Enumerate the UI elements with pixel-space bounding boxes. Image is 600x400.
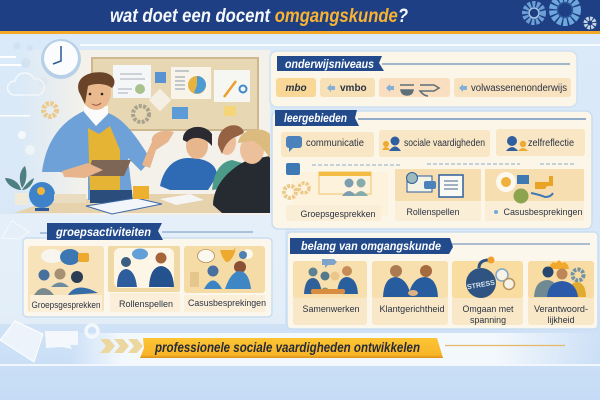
card: Groepsgesprekken: Groepsgesprekken: [300, 209, 376, 220]
banner: professionele sociale vaardigheden ontwikkelen: [140, 338, 443, 358]
header band: [0, 0, 600, 34]
chip: volwassenenonderwijs: volwassenenonderwijs: [471, 83, 567, 94]
cork board: [92, 58, 258, 130]
chip: arrow with icons: [379, 78, 450, 97]
card: Casusbesprekingen: [485, 169, 584, 221]
card: Omgaan met spanning: spanning: [470, 315, 506, 326]
chip: volwassenenonderwijs: [454, 78, 571, 97]
arrow line: [445, 344, 565, 346]
chip: zelfreflectie: [496, 129, 585, 156]
student 2: [212, 125, 252, 190]
heading: groepsactiviteiten: groepsactiviteiten: [55, 225, 151, 239]
chip: sociale vaardigheden: [379, 130, 490, 157]
chip: mbo: [276, 78, 316, 97]
chip: communicatie: communicatie: [306, 138, 364, 149]
chevrons: [100, 339, 143, 353]
globe: [29, 182, 55, 211]
chip: sociale vaardigheden: sociale vaardigheden: [404, 138, 485, 149]
card: Verantwoordelijkheid: Verantwoord-: [534, 304, 588, 315]
card: Casusbesprekingen: [184, 246, 266, 312]
banner: professionele sociale vaardigheden ontwikkelen: professionele sociale vaardigheden ontwikkelen: [154, 340, 420, 355]
card: Omgaan met spanning: STRESS: [467, 280, 496, 291]
card: Rollenspellen: [108, 246, 180, 312]
decorative icons lower left: [0, 221, 98, 362]
clock: [41, 39, 81, 79]
teacher: [42, 72, 174, 203]
card: Groepsgesprekken: [28, 246, 104, 312]
card: Verantwoordelijkheid: [528, 260, 594, 326]
card: Klantgerichtheid: [372, 261, 448, 325]
student 1: [160, 127, 217, 190]
card: Rollenspellen: Rollenspellen: [119, 299, 173, 310]
card: Klantgerichtheid: Klantgerichtheid: [380, 304, 444, 315]
card: Verantwoordelijkheid: lijkheid: [548, 315, 574, 326]
heading: belang van omgangskunde: belang van omgangskunde: [301, 239, 441, 253]
panel: leergebieden: [272, 110, 592, 229]
heading: leergebieden: leergebieden: [284, 111, 347, 125]
card: Samenwerken: Samenwerken: [302, 304, 360, 315]
chip: communicatie: [281, 132, 374, 157]
card: Omgaan met spanning: [452, 256, 523, 326]
student 3: [213, 129, 270, 213]
icon: header gears: [525, 0, 594, 28]
card: Rollenspellen: [395, 169, 481, 221]
card: Casusbesprekingen: Casusbesprekingen: [188, 298, 266, 309]
chip: zelfreflectie: zelfreflectie: [528, 138, 574, 149]
panel: onderwijsniveaus: [270, 51, 577, 107]
paper and pencil cup: [86, 198, 162, 214]
chip: vmbo: [320, 78, 375, 97]
books: [54, 194, 86, 203]
hero illustration: [5, 39, 270, 215]
card: Rollenspellen: Rollenspellen: [406, 207, 460, 218]
panel: groepsactiviteiten: [23, 223, 272, 317]
card: Groepsgesprekken: Groepsgesprekken: [32, 300, 100, 311]
plant: [5, 166, 34, 205]
card: Omgaan met spanning: Omgaan met: [462, 304, 514, 315]
card: Casusbesprekingen: Casusbesprekingen: [504, 207, 582, 218]
card: Groepsgesprekken: [284, 163, 388, 221]
chip: vmbo: vmbo: [340, 83, 367, 94]
panel: belang van omgangskunde: [287, 232, 598, 329]
title: wat doet een docent omgangskunde?: [110, 6, 408, 27]
icon: gear: [44, 104, 56, 116]
banner band: [70, 333, 600, 364]
decorative cloud and network, left: [0, 42, 48, 155]
card: Samenwerken: [293, 259, 367, 325]
heading: onderwijsniveaus: onderwijsniveaus: [285, 57, 374, 71]
dashed connector: [312, 164, 575, 165]
desk: [14, 194, 240, 213]
chip: mbo: mbo: [285, 83, 307, 94]
